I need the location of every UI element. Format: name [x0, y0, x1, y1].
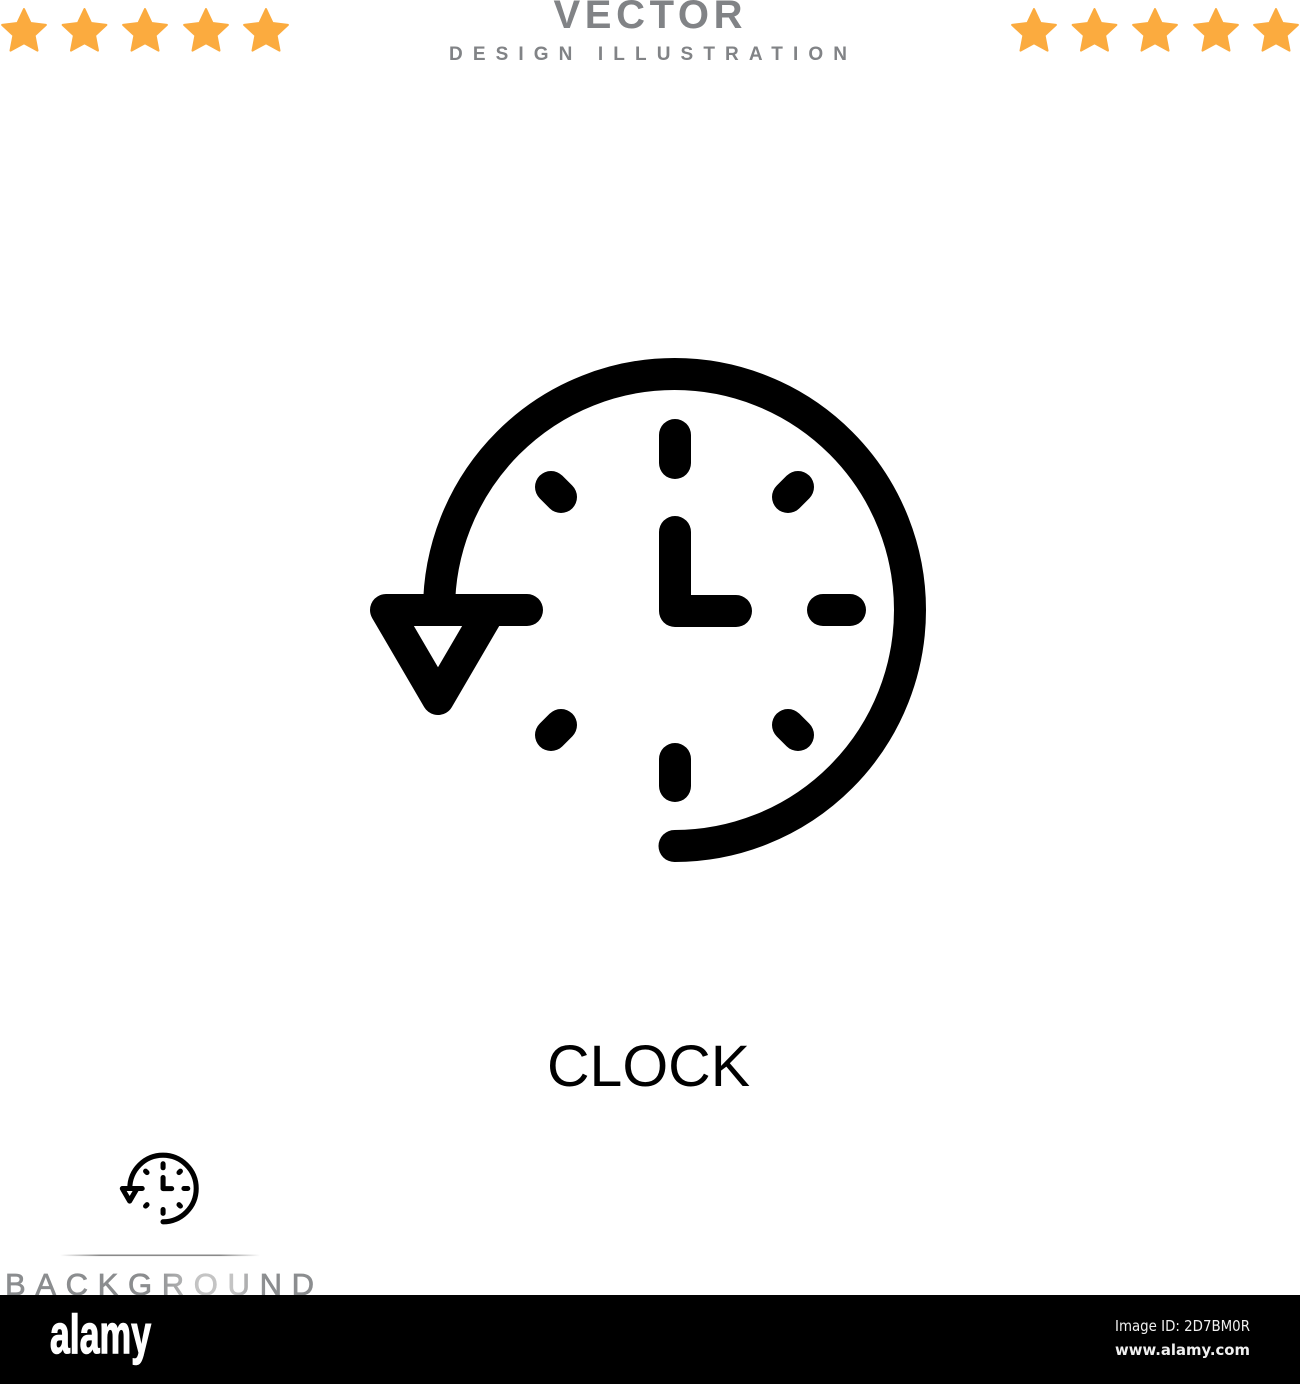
- arrow head and shaft: [386, 610, 527, 699]
- star rating: right: [1012, 9, 1298, 51]
- clock hour ticks: [551, 435, 850, 786]
- footer bar: [0, 1295, 1300, 1384]
- clock hands: [675, 532, 736, 611]
- star rating: left: [2, 9, 288, 51]
- label: CLOCK: CLOCK: [547, 1034, 750, 1099]
- icon: small clock thumbnail: [122, 1155, 196, 1222]
- subheading: DESIGN ILLUSTRATION: DESIGN ILLUSTRATION: [449, 44, 847, 65]
- website: www.alamy.com: [1115, 1341, 1250, 1359]
- icon: clock with counter-clockwise arrow: [386, 374, 910, 846]
- label: BACKGROUND: BACKGROUND: [5, 1267, 314, 1302]
- divider line above BACKGROUND: [60, 1254, 260, 1256]
- clock rim arc: [439, 374, 910, 846]
- image id: Image ID: 2D7BM0R: [1115, 1317, 1250, 1335]
- alamy logo: alamy: [50, 1303, 151, 1365]
